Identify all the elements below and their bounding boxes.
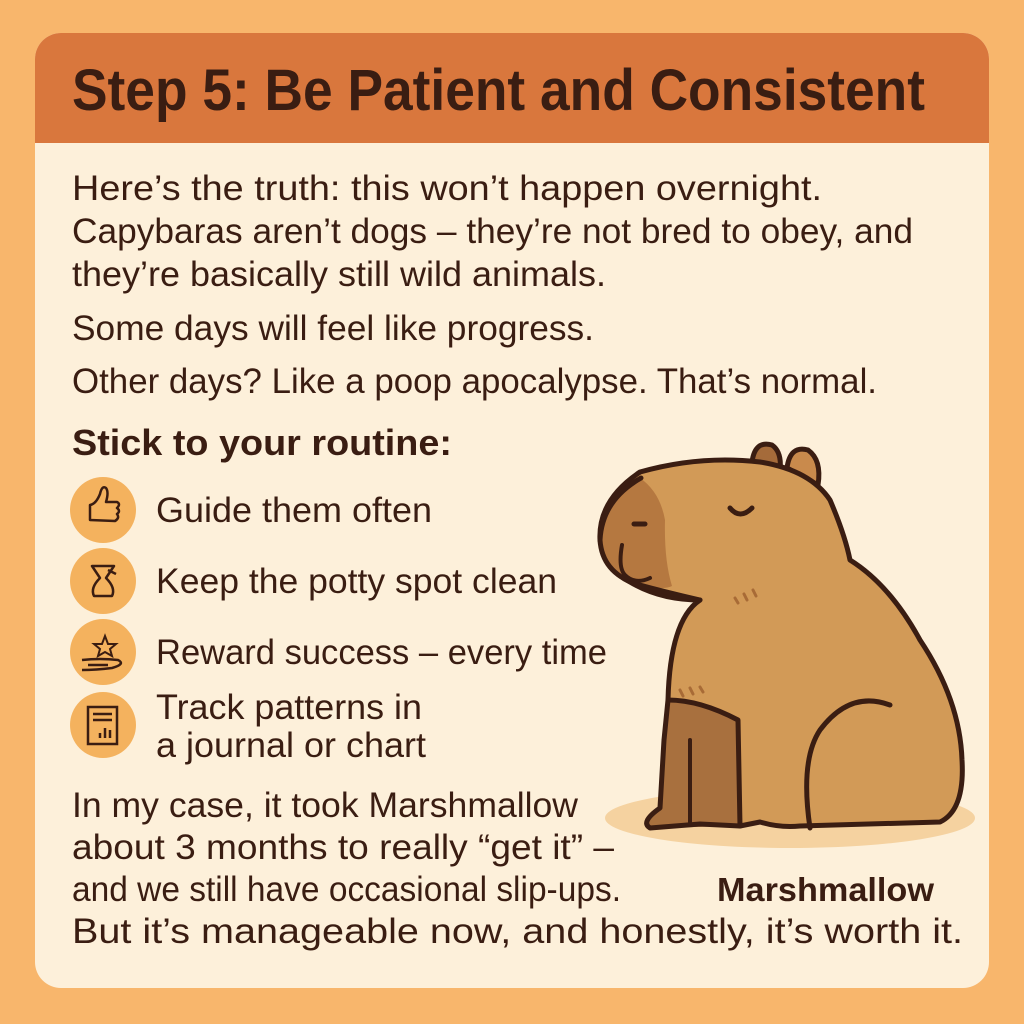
body (600, 460, 962, 826)
list: routine items: Guide them often (156, 491, 432, 530)
list: routine items: Track patterns in (156, 688, 422, 727)
icon: potty bag (70, 548, 136, 614)
header band (35, 33, 989, 143)
text block: intro: they’re basically still wild animals. (72, 255, 606, 294)
illustration: capybara (600, 444, 975, 848)
heading: routine: Stick to your routine: (72, 422, 452, 463)
list: routine items: Keep the potty spot clean (156, 562, 557, 601)
icon: journal chart (70, 692, 136, 758)
caption: Marshmallow: Marshmallow (717, 871, 934, 908)
text block: intro: Some days will feel like progress. (72, 309, 594, 348)
title: Step 5: Be Patient and Consistent (72, 58, 925, 123)
text block: intro: Other days? Like a poop apocalypse. That’s normal. (72, 362, 877, 401)
list: routine items: a journal or chart (156, 726, 426, 765)
list: routine items (70, 477, 607, 765)
icon: hand with star (70, 619, 136, 685)
list: routine items: Reward success – every time (156, 633, 607, 672)
fur marks (680, 590, 756, 696)
snout (601, 478, 672, 588)
text block: closing: In my case, it took Marshmallow (72, 786, 579, 825)
icon: thumbs up (70, 477, 136, 543)
haunch (807, 701, 890, 828)
text block: intro: Here’s the truth: this won’t happen overnight. (72, 169, 822, 208)
eye, nose, mouth (730, 508, 752, 514)
text block: closing: and we still have occasional slip-ups. (72, 870, 621, 909)
text block: intro (72, 169, 913, 401)
text block: closing (72, 786, 963, 951)
text block: closing: But it’s manageable now, and honestly, it’s worth it. (72, 912, 963, 951)
back legs shading (649, 700, 740, 828)
text block: closing: about 3 months to really “get it” – (72, 828, 615, 867)
text block: intro: Capybaras aren’t dogs – they’re not bred to obey, and (72, 212, 913, 251)
ears (752, 444, 780, 470)
